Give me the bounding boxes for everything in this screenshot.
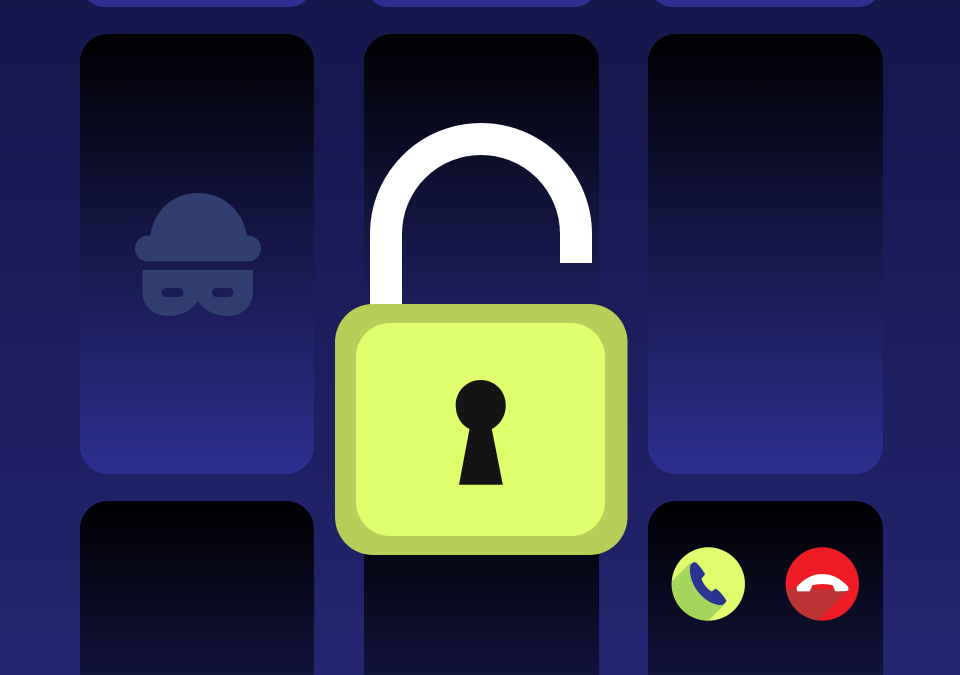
panel: bottom right call screen	[648, 501, 883, 675]
padlock body	[335, 304, 628, 555]
padlock keyhole	[456, 380, 506, 485]
icon: masked thief	[135, 193, 261, 316]
icon: answer call button	[672, 547, 745, 621]
icon: reject call button	[780, 547, 859, 621]
top row of phone screens	[88, 0, 875, 7]
panel: bottom centre screen	[364, 501, 599, 675]
panel: bottom left screen	[80, 501, 314, 675]
panel: centre screen	[364, 34, 599, 474]
padlock face	[356, 323, 605, 536]
icon: open padlock	[335, 139, 628, 555]
panel: screen with thief icon	[80, 34, 314, 474]
padlock shackle	[386, 139, 576, 310]
panel: right blank screen	[648, 34, 883, 474]
